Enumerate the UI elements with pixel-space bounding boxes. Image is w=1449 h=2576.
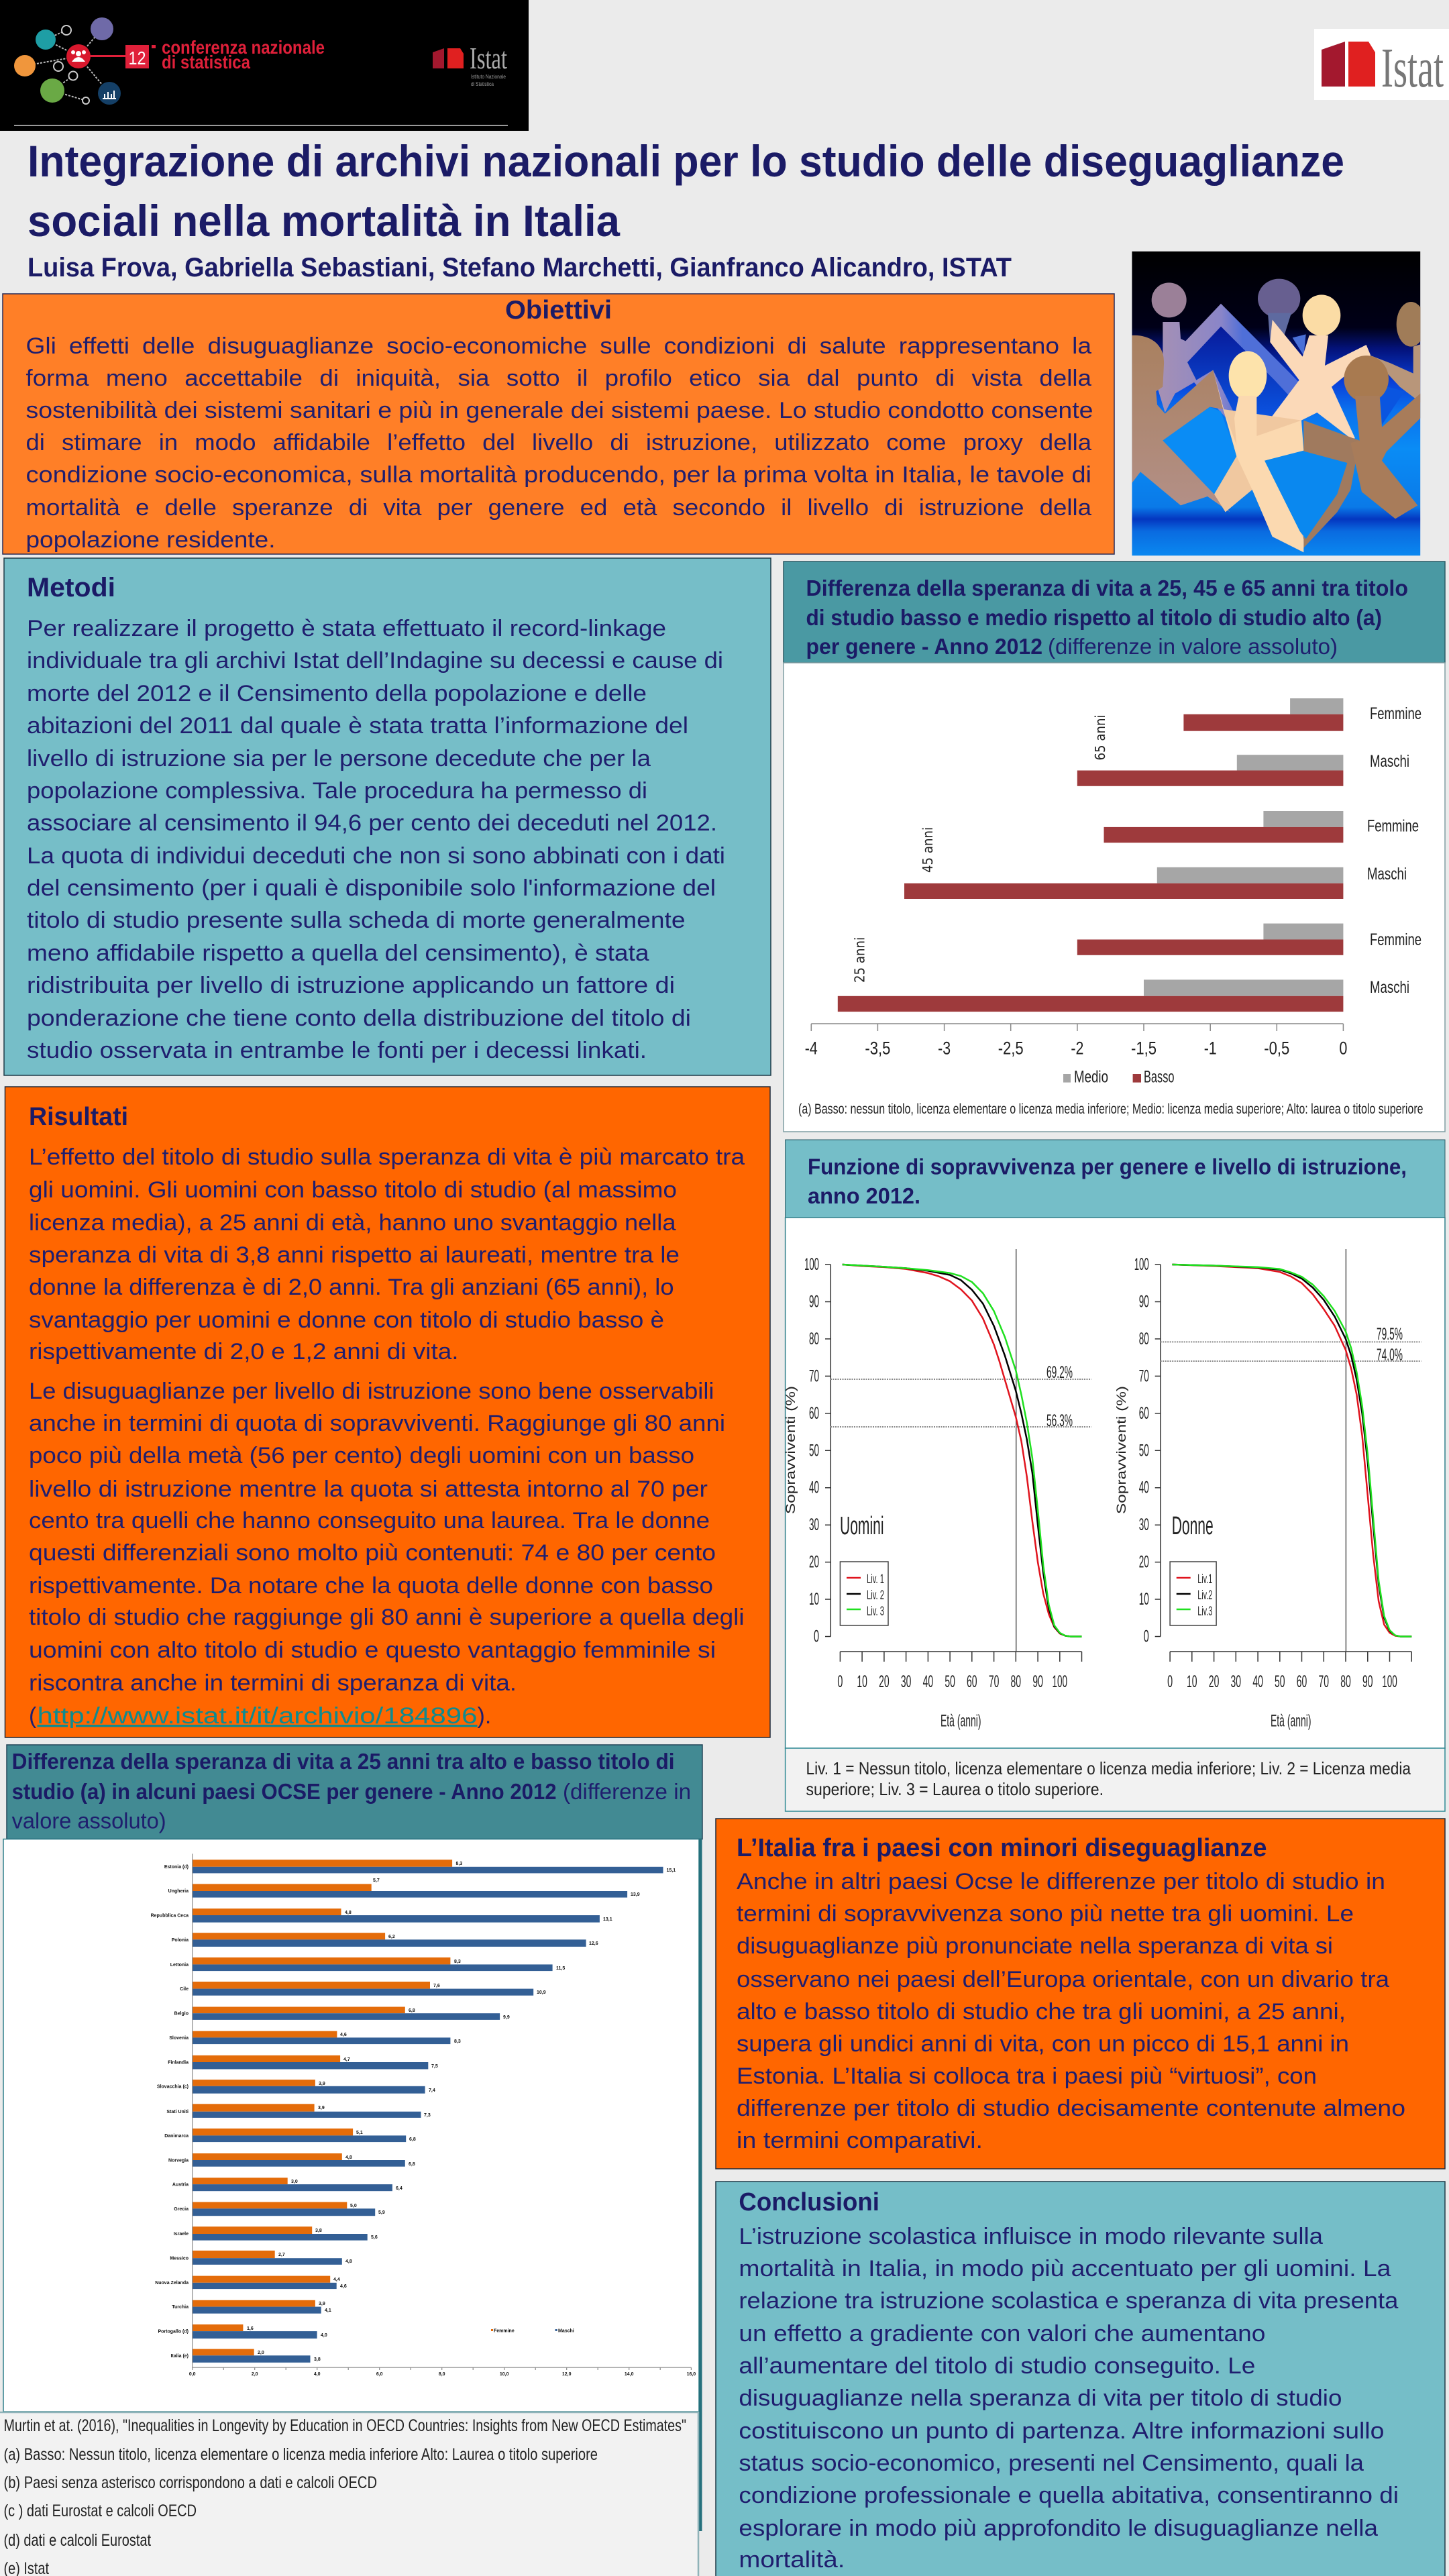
value labels: 3,8: [314, 2357, 321, 2362]
text block: l'italia: disuguaglianze più pronunciate nella speranza di vita si: [737, 1933, 1333, 1959]
panel: risultati: [5, 1087, 770, 1737]
value labels: 3,8: [315, 2229, 322, 2233]
line chart: uomini: Uomini: [840, 1512, 884, 1540]
text block: risultati: svantaggio per uomini e donne con titolo di studio basso è: [29, 1307, 664, 1333]
text block: obiettivi: Gli effetti delle disuguaglianze socio-economiche sulle condizioni di salute rappresentano la: [25, 333, 1091, 359]
line chart: donne: 10: [1139, 1590, 1149, 1609]
value labels: 7,6: [433, 1984, 440, 1988]
text block: metodi: titolo di studio presente sulla scheda di morte generalmente: [27, 908, 686, 933]
legend: donne: Liv.1: [1197, 1572, 1212, 1587]
line chart: donne: 40: [1252, 1672, 1263, 1691]
x axis labels: 14,0: [625, 2372, 634, 2377]
text block: risultati: speranza di vita di 3,8 anni rispetto ai laureati, mentre tra le: [29, 1242, 680, 1268]
sources and notes: (b) Paesi senza asterisco corrispondono a dati e calcoli OECD: [4, 2473, 377, 2492]
line chart: uomini: 30: [809, 1515, 819, 1534]
axis labels: -3,5: [865, 1038, 890, 1058]
age labels: [852, 715, 1108, 983]
value labels: 10,9: [537, 1990, 546, 1995]
line chart: donne: 100: [1382, 1672, 1397, 1691]
gender labels: Femmine: [1370, 930, 1421, 949]
country labels: Danimarca: [164, 2134, 189, 2139]
age labels: 25 anni: [852, 937, 868, 983]
text block: conclusioni: relazione tra istruzione scolastica e speranza di vita presenta: [739, 2288, 1398, 2314]
value labels: 4,7: [343, 2057, 350, 2062]
text block: obiettivi: mortalità e delle speranze di vita per genere ed età secondo il livello di istruzione della: [25, 495, 1091, 521]
line chart: donne: 50: [1275, 1672, 1285, 1691]
heading: risultati: Risultati: [29, 1103, 128, 1131]
title: sociali nella mortalità in Italia: [28, 196, 621, 246]
line chart: uomini: 20: [879, 1672, 890, 1691]
sources and notes: (c ) dati Eurostat e calcoli OECD: [4, 2502, 197, 2520]
title: [28, 136, 1344, 246]
line chart: donne: 0: [1167, 1672, 1173, 1691]
line chart: uomini: 70: [989, 1672, 999, 1691]
line chart: donne: [1115, 1249, 1421, 1731]
line chart: donne: 100: [1134, 1255, 1149, 1274]
line chart: uomini: 0: [837, 1672, 843, 1691]
value labels: 5,7: [373, 1878, 380, 1883]
line chart: donne: 80: [1139, 1330, 1149, 1348]
text block: risultati: (: [29, 1703, 37, 1729]
text block: l'italia: [737, 1869, 1405, 2153]
heading: obiettivi: Obiettivi: [505, 296, 612, 325]
panel: oecd countries chart: [0, 1745, 702, 2576]
value labels: 2,7: [278, 2253, 285, 2257]
x axis labels: [189, 2372, 696, 2377]
legend: Maschi: [558, 2329, 574, 2333]
value labels: 11,5: [556, 1966, 565, 1971]
line chart: uomini: 20: [809, 1553, 819, 1572]
chart header: (differenze in valore assoluto): [1048, 634, 1338, 659]
conference name: di statistica: [162, 52, 250, 72]
panel: metodi: [4, 558, 771, 1075]
gender labels: Maschi: [1370, 978, 1409, 997]
country labels: Slovacchia (c): [157, 2085, 189, 2089]
line chart: uomini: 50: [945, 1672, 955, 1691]
value labels: 6,8: [409, 2137, 416, 2142]
country labels: Portogallo (d): [158, 2329, 189, 2334]
text block: risultati: questi differenziali sono molto più contenuti: 74 e 80 per cento: [29, 1540, 716, 1566]
line chart: donne: 10: [1187, 1672, 1197, 1691]
text block: metodi: La quota di individui deceduti che non si sono abbinati con i dati: [27, 843, 725, 869]
conference number badge: [125, 45, 156, 68]
axis labels: -0,5: [1264, 1038, 1289, 1058]
text block: conclusioni: mortalità.: [739, 2547, 845, 2573]
value labels: 7,3: [424, 2113, 431, 2118]
value labels: 5,0: [350, 2204, 357, 2208]
line chart: uomini: 40: [923, 1672, 933, 1691]
line chart: uomini: 80: [809, 1330, 819, 1348]
icon: navy chart circle: [98, 82, 121, 105]
text block: l'italia: osservano nei paesi dell’Europa orientale, con un divario tra: [737, 1967, 1389, 1992]
istat logo in banner: [433, 41, 507, 87]
value labels: 4,8: [345, 2155, 352, 2160]
text block: risultati: Le disuguaglianze per livello di istruzione sono bene osservabili: [29, 1379, 714, 1404]
sources and notes: [0, 2412, 699, 2576]
text block: metodi: [27, 616, 725, 1063]
country labels: Norvegia: [168, 2159, 189, 2163]
text block: risultati: gli uomini. Gli uomini con basso titolo di studio (al massimo: [29, 1177, 677, 1203]
authors: Luisa Frova, Gabriella Sebastiani, Stefano Marchetti, Gianfranco Alicandro, ISTAT: [28, 253, 1012, 282]
text block: risultati: L’effetto del titolo di studio sulla speranza di vita è più marcato tra: [29, 1144, 745, 1170]
x axis labels: 0,0: [189, 2372, 196, 2377]
text block: l'italia: supera gli undici anni di vita, con un picco di 15,1 anni in: [737, 2031, 1349, 2057]
value labels: 6,8: [409, 2008, 415, 2013]
line chart: uomini: 90: [1032, 1672, 1043, 1691]
legend: uomini: Liv. 2: [867, 1589, 884, 1603]
value labels: 4,0: [321, 2333, 327, 2338]
value labels: 6,8: [409, 2162, 415, 2167]
text block: metodi: studio osservata in entrambe le fonti per i decessi linkati.: [27, 1038, 647, 1063]
country labels: Austria: [172, 2183, 189, 2187]
text block: risultati: livello di istruzione mentre la quota si attesta intorno al 70 per: [29, 1477, 708, 1502]
text block: l'italia: differenze per titolo di studio decisamente contenute almeno: [737, 2096, 1405, 2121]
note: levels key: superiore; Liv. 3 = Laurea o titolo superiore.: [806, 1779, 1104, 1799]
femmine bars: [193, 1860, 452, 2355]
value labels: 3,0: [291, 2180, 298, 2184]
text block: l'italia: in termini comparativi.: [737, 2128, 983, 2153]
sources and notes: (a) Basso: Nessun titolo, licenza elementare o licenza media inferiore Alto: Laurea o titolo superiore: [4, 2445, 598, 2464]
photo: paper figures holding hands: [1132, 252, 1426, 555]
text block: conclusioni: esplorare in modo più approfondito le disuguaglianze nella: [739, 2516, 1378, 2541]
line chart: donne: Sopravviventi (%): [1115, 1386, 1129, 1514]
country labels: Grecia: [174, 2207, 189, 2212]
text block: metodi: ridistribuita per livello di istruzione applicando un fattore di: [27, 973, 675, 998]
x axis labels: 4,0: [314, 2372, 321, 2377]
text block: risultati: rispettivamente. Da notare che la quota delle donne con basso: [29, 1573, 713, 1599]
value labels: 4,8: [345, 1911, 352, 1915]
line chart: uomini: 70: [809, 1366, 819, 1385]
text block: conclusioni: disuguaglianze nella speranza di vita per titolo di studio: [739, 2385, 1342, 2411]
chart header: per genere - Anno 2012: [806, 634, 1042, 659]
text block: conclusioni: costituiscono un punto di partenza. Altre informazioni sullo: [739, 2418, 1384, 2444]
chart header: [7, 1745, 702, 1839]
line chart: donne: 20: [1209, 1672, 1219, 1691]
value labels: 7,5: [431, 2064, 438, 2069]
line chart: uomini: 60: [809, 1404, 819, 1423]
text block: metodi: ponderazione che tiene conto della distribuzione del titolo di: [27, 1006, 691, 1031]
value labels: 6,4: [396, 2186, 402, 2191]
country labels: Estonia (d): [164, 1865, 189, 1870]
chart header: Differenza della speranza di vita a 25 anni tra alto e basso titolo di: [12, 1749, 675, 1774]
legend: donne: Liv.3: [1197, 1605, 1212, 1619]
chart body: [786, 1218, 1445, 1748]
text block: obiettivi: sostenibilità dei sistemi sanitari e più in generale dei sistemi paese. Lo studio condotto consente: [25, 398, 1093, 423]
text block: risultati: [29, 1144, 745, 1729]
line chart: uomini: 40: [809, 1479, 819, 1497]
gender labels: Maschi: [1367, 865, 1407, 883]
value labels: 3,9: [319, 2082, 325, 2086]
line chart: donne: 0: [1144, 1627, 1149, 1646]
line chart: uomini: 80: [1011, 1672, 1021, 1691]
country labels: [151, 1865, 189, 2359]
line chart: donne: 70: [1139, 1366, 1149, 1385]
value labels: 15,1: [667, 1868, 676, 1873]
x axis labels: 12,0: [562, 2372, 572, 2377]
conference banner: [0, 0, 529, 131]
text block: metodi: morte del 2012 e il Censimento della popolazione e delle: [27, 681, 647, 706]
country labels: Messico: [170, 2257, 189, 2261]
value labels: 13,1: [603, 1917, 612, 1922]
istat logo: [1314, 29, 1449, 100]
text block: conclusioni: [739, 2224, 1399, 2573]
line chart: donne: 90: [1362, 1672, 1373, 1691]
legend: Femmine: [494, 2329, 515, 2333]
country labels: Finlandia: [168, 2061, 189, 2065]
legend: [1063, 1068, 1174, 1087]
conference name: [162, 37, 325, 72]
axis labels: -3: [938, 1038, 951, 1058]
axis labels: -4: [805, 1038, 818, 1058]
line chart: donne: 74.0%: [1377, 1346, 1403, 1364]
text block: conclusioni: condizione professionale e quella abitativa, consentiranno di: [739, 2483, 1399, 2508]
value labels: 4,6: [340, 2033, 347, 2037]
line chart: uomini: 50: [809, 1441, 819, 1460]
text block: l'italia: Estonia. L’Italia si colloca tra i paesi più “virtuosi”, con: [737, 2063, 1317, 2089]
text block: conclusioni: all’aumentare del titolo di studio conseguito. Le: [739, 2353, 1255, 2379]
istat logo in banner: Istituto Nazionale: [471, 74, 506, 80]
axis labels: -2,5: [998, 1038, 1024, 1058]
value labels: [247, 1862, 676, 2362]
line chart: donne: Donne: [1172, 1512, 1214, 1540]
icon: teal circle: [36, 30, 56, 50]
line chart: uomini: 69.2%: [1046, 1363, 1073, 1382]
chart header: [784, 561, 1445, 663]
text block: risultati: uomini con alto titolo di studio e questo vantaggio femminile si: [29, 1638, 716, 1663]
x axis labels: 2,0: [252, 2372, 258, 2377]
text block: risultati: poco più della metà (56 per cento) degli uomini con un basso: [29, 1443, 694, 1468]
panel: conclusioni: [716, 2182, 1445, 2576]
icon: purple circle: [91, 17, 113, 40]
value labels: 12,6: [589, 1941, 598, 1946]
text block: metodi: livello di istruzione sia per le persone decedute che per la: [27, 746, 651, 771]
legend: Basso: [1144, 1068, 1174, 1087]
heading: l'italia: L’Italia fra i paesi con minori diseguaglianze: [737, 1834, 1267, 1862]
text block: metodi: abitazioni del 2011 dal quale è stata tratta l’informazione del: [27, 713, 688, 739]
sources and notes: Murtin et at. (2016), "Inequalities in Longevity by Education in OECD Countries: Insights from New OECD Estimates": [4, 2416, 686, 2435]
line chart: uomini: Sopravviventi (%): [784, 1386, 798, 1514]
conference number badge: 12: [129, 48, 146, 68]
chart header: valore assoluto): [12, 1809, 166, 1833]
text block: metodi: meno affidabile rispetto a quella del censimento), è stata: [27, 941, 649, 966]
chart header: (differenze in: [563, 1779, 691, 1804]
sources and notes: (d) dati e calcoli Eurostat: [4, 2531, 151, 2550]
country labels: Belgio: [174, 2011, 189, 2017]
text block: obiettivi: popolazione residente.: [25, 527, 275, 553]
country labels: Lettonia: [170, 1963, 189, 1968]
line chart: donne: 80: [1340, 1672, 1351, 1691]
bar chart: medio and basso by age and gender: [805, 698, 1421, 1058]
age labels: 45 anni: [920, 827, 936, 873]
chart header: di studio basso e medio rispetto al titolo di studio alto (a): [806, 605, 1382, 630]
gender labels: Femmine: [1370, 704, 1421, 723]
line chart: donne: 40: [1139, 1479, 1149, 1497]
value labels: 3,9: [318, 2106, 325, 2110]
legend: uomini: Liv. 3: [867, 1605, 884, 1619]
age labels: 65 anni: [1092, 715, 1108, 761]
text block: risultati: donne la differenza è di 2,0 anni. Tra gli anziani (65 anni), lo: [29, 1275, 674, 1300]
value labels: 9,9: [503, 2015, 510, 2020]
line chart: donne: 60: [1139, 1404, 1149, 1423]
value labels: 4,4: [333, 2277, 340, 2282]
chart header: [786, 1140, 1445, 1218]
value labels: 2,0: [258, 2351, 264, 2355]
value labels: 13,9: [631, 1892, 640, 1897]
icon: green circle: [40, 78, 64, 103]
line chart: uomini: Età (anni): [941, 1712, 981, 1731]
text block: risultati: cento tra quelli che hanno conseguito una laurea. Tra le donne: [29, 1508, 710, 1534]
text block: metodi: del censimento (per i quali è disponibile solo l'informazione del: [27, 875, 716, 901]
value labels: 8,3: [454, 1960, 461, 1964]
country labels: Israele: [174, 2232, 189, 2237]
line chart: donne: 30: [1231, 1672, 1241, 1691]
x axis labels: 10,0: [500, 2372, 509, 2377]
text block: obiettivi: forma meno accettabile di iniquità, sia sotto il profilo etico sia dal punto di vista della: [25, 366, 1091, 391]
text block: risultati: riscontra anche in termini di speranza di vita.: [29, 1670, 517, 1696]
line chart: uomini: 100: [1053, 1672, 1067, 1691]
country labels: Cile: [180, 1987, 189, 1992]
value labels: 7,4: [429, 2088, 435, 2093]
country labels: Turchia: [172, 2305, 189, 2310]
legend: donne: [1170, 1562, 1216, 1625]
gender labels: Maschi: [1370, 752, 1409, 771]
panel: l'italia fra i paesi: [716, 1819, 1445, 2169]
istat logo in banner: Istat: [470, 41, 507, 75]
country labels: Polonia: [172, 1938, 189, 1943]
conference name: conferenza nazionale: [162, 37, 325, 58]
text block: risultati: rispettivamente di 2,0 e 1,2 anni di vita.: [29, 1339, 459, 1364]
line chart: donne: 30: [1139, 1515, 1149, 1534]
value labels: 6,2: [388, 1935, 395, 1939]
text block: obiettivi: di stimare in modo affidabile l’effetto del livello di istruzione, utilizzato come proxy della: [25, 430, 1091, 455]
text block: risultati: titolo di studio che raggiunge gli 80 anni è superiore a quella degli: [29, 1605, 745, 1630]
text block: l'italia: termini di sopravvivenza sono più nette tra gli uomini. Le: [737, 1901, 1354, 1927]
value labels: 1,6: [247, 2326, 254, 2331]
line chart: uomini: 100: [804, 1255, 819, 1274]
axis labels: 0: [1339, 1038, 1347, 1058]
value labels: 5,6: [371, 2235, 378, 2240]
line chart: uomini: 30: [901, 1672, 911, 1691]
note: levels key: [786, 1748, 1445, 1811]
line chart: uomini: 90: [809, 1292, 819, 1311]
icon: red people circle: [66, 44, 125, 68]
line chart: uomini: 0: [814, 1627, 819, 1646]
chart header: Differenza della speranza di vita a 25, 45 e 65 anni tra titolo: [806, 576, 1408, 600]
chart body: [784, 663, 1445, 1132]
axis labels: [805, 1038, 1347, 1058]
line chart: donne: 70: [1319, 1672, 1329, 1691]
text block: l'italia: alto e basso titolo di studio che tra gli uomini, a 25 anni,: [737, 1999, 1346, 2025]
title: Integrazione di archivi nazionali per lo studio delle diseguaglianze: [28, 136, 1344, 186]
text block: conclusioni: un effetto a gradiente con valori che aumentano: [739, 2321, 1265, 2347]
axis labels: -1,5: [1131, 1038, 1157, 1058]
panel: obiettivi: [3, 294, 1114, 554]
line chart: uomini: 10: [857, 1672, 867, 1691]
value labels: 8,3: [456, 1862, 462, 1866]
text block: risultati: anche in termini di quota di sopravviventi. Raggiunge gli 80 anni: [29, 1411, 725, 1436]
value labels: 5,9: [378, 2210, 385, 2215]
bar chart: femmine and maschi by country: [151, 1854, 696, 2377]
country labels: Slovenia: [169, 2036, 189, 2041]
legend: donne: Liv.2: [1197, 1589, 1212, 1603]
line chart: uomini: [784, 1249, 1091, 1731]
text block: risultati: licenza media), a 25 anni di età, hanno uno svantaggio nella: [29, 1210, 676, 1236]
line chart: donne: 90: [1139, 1292, 1149, 1311]
text block: obiettivi: condizione socio-economica, sulla mortalità producendo, per la prima volta in Italia, le tavole di: [25, 462, 1091, 488]
value labels: 4,1: [325, 2308, 331, 2313]
value labels: 3,9: [319, 2302, 325, 2306]
country labels: Repubblica Ceca: [151, 1913, 189, 1919]
panel: life expectancy difference chart: [784, 561, 1445, 1132]
legend: Medio: [1074, 1068, 1108, 1087]
chart body: [3, 1839, 699, 2412]
line chart: donne: 79.5%: [1377, 1325, 1403, 1344]
line chart: uomini: 56.3%: [1046, 1411, 1073, 1430]
panel: survival function charts: [784, 1140, 1445, 1811]
line chart: donne: 60: [1297, 1672, 1307, 1691]
text block: risultati: ).: [478, 1703, 491, 1729]
x axis labels: 8,0: [439, 2372, 445, 2377]
chart header: Funzione di sopravvivenza per genere e livello di istruzione,: [808, 1154, 1407, 1179]
line chart: donne: Età (anni): [1271, 1712, 1311, 1731]
legend: [491, 2329, 574, 2333]
heading: metodi: Metodi: [27, 573, 115, 602]
country labels: Stati Uniti: [166, 2110, 189, 2114]
text block: metodi: associare al censimento il 94,6 per cento dei deceduti nel 2012.: [27, 810, 717, 836]
text block: obiettivi: [25, 333, 1093, 553]
text block: metodi: individuale tra gli archivi Istat dell’Indagine su decessi e cause di: [27, 648, 723, 674]
value labels: 4,8: [345, 2259, 352, 2264]
country labels: Nuova Zelanda: [155, 2281, 189, 2286]
chart header: studio (a) in alcuni paesi OCSE per genere - Anno 2012: [12, 1779, 557, 1804]
x axis labels: 16,0: [687, 2372, 696, 2377]
text block: l'italia: Anche in altri paesi Ocse le differenze per titolo di studio in: [737, 1869, 1385, 1894]
country labels: Ungheria: [168, 1889, 189, 1894]
heading: conclusioni: Conclusioni: [739, 2188, 879, 2216]
text block: conclusioni: mortalità in Italia, in modo più accentuato per gli uomini. La: [739, 2256, 1391, 2282]
value labels: 5,1: [356, 2131, 363, 2135]
icon: orange circle: [14, 55, 36, 76]
country labels: Italia (e): [171, 2354, 189, 2359]
value labels: 4,6: [340, 2284, 347, 2289]
line chart: uomini: 60: [967, 1672, 977, 1691]
gender labels: Femmine: [1367, 817, 1419, 836]
maschi bars: [193, 1867, 663, 2363]
line chart: donne: 20: [1139, 1553, 1149, 1572]
istat logo in banner: di Statistica: [471, 81, 494, 87]
legend: uomini: [840, 1562, 888, 1625]
text block: risultati: http://www.istat.it/it/archivio/184896: [38, 1703, 478, 1729]
axis labels: -1: [1204, 1038, 1217, 1058]
line chart: donne: 50: [1139, 1441, 1149, 1460]
text block: conclusioni: status socio-economico, presenti nel Censimento, quali la: [739, 2451, 1364, 2476]
line chart: uomini: 10: [809, 1590, 819, 1609]
chart header: anno 2012.: [808, 1183, 920, 1208]
axis labels: -2: [1071, 1038, 1083, 1058]
value labels: 8,3: [454, 2039, 461, 2044]
text block: metodi: popolazione complessiva. Tale procedura ha permesso di: [27, 778, 647, 804]
legend: uomini: Liv. 1: [867, 1572, 884, 1587]
x axis labels: 6,0: [376, 2372, 383, 2377]
text block: conclusioni: L’istruzione scolastica influisce in modo rilevante sulla: [739, 2224, 1323, 2249]
text block: metodi: Per realizzare il progetto è stata effettuato il record-linkage: [27, 616, 666, 641]
gender labels: [1367, 704, 1421, 997]
